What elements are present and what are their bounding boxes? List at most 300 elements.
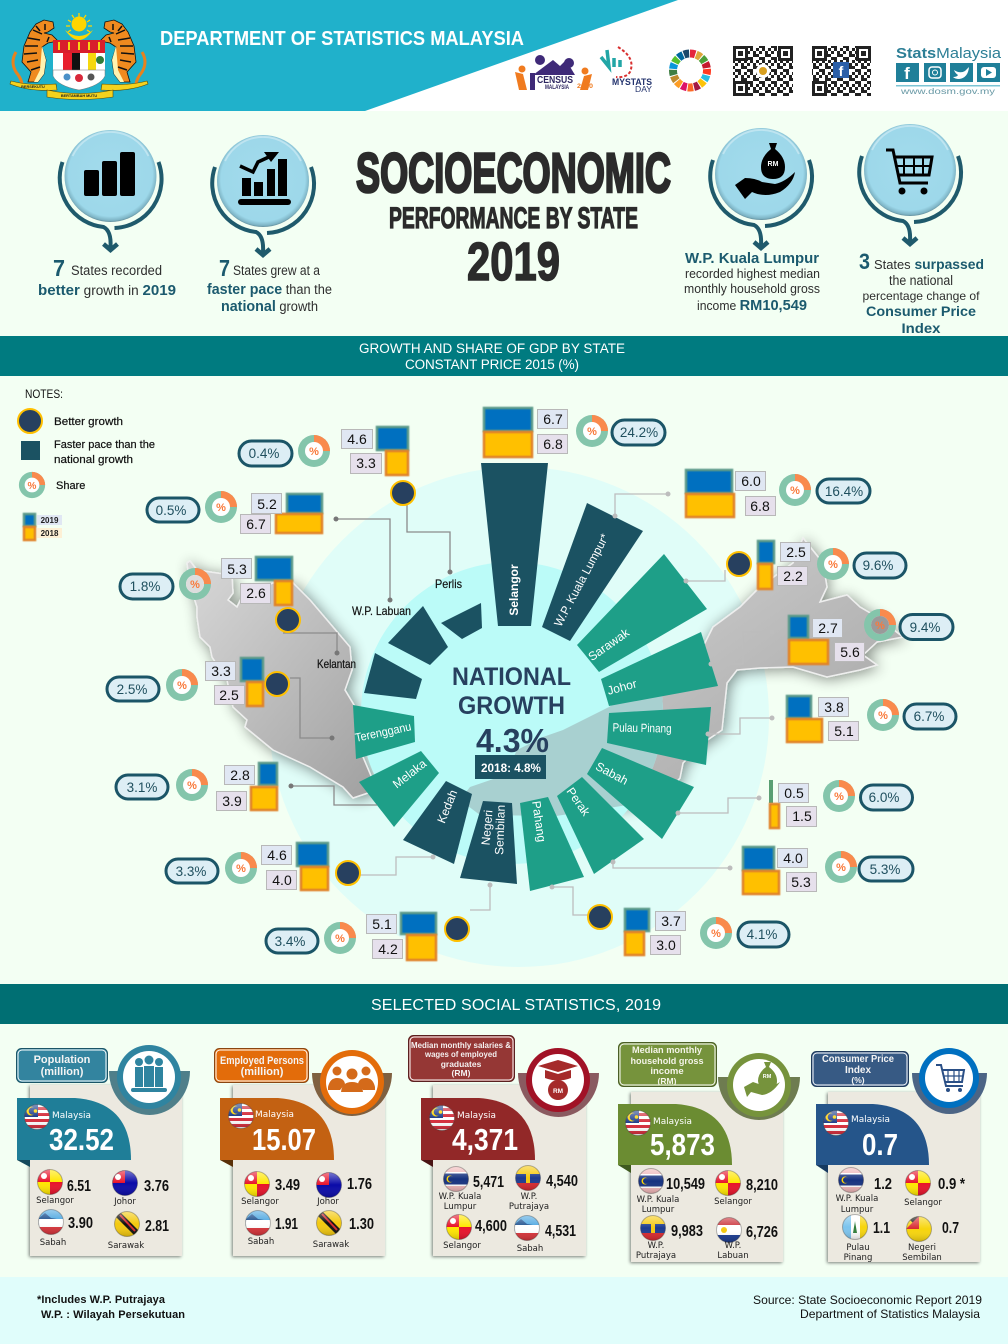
logo: Census 2020: 2020 [577, 83, 593, 90]
label: household gross [630, 1056, 704, 1067]
states: W.P. Kuala [836, 1194, 878, 1204]
state: Melaka [116, 763, 377, 810]
wedge: Kedah: Kedah [434, 788, 460, 825]
bars: 6.7 [543, 411, 563, 427]
bars [769, 780, 816, 828]
states [241, 1171, 374, 1250]
section band: selected social statistics: SELECTED SOCIAL STATISTICS, 2019 [371, 997, 661, 1014]
logo: MyStats Day: MYSTATS [612, 77, 652, 88]
text: 7 states grew at a faster pace: faster pace than the [207, 281, 332, 298]
states: Putrajaya [636, 1251, 676, 1261]
state: Sarawak [684, 541, 906, 589]
text: 3 states surpassed CPI: States surpassed [874, 256, 984, 272]
wedge: Negeri Sembilan [460, 801, 517, 884]
wedge: Johor: Johor [606, 676, 638, 698]
label [618, 1042, 716, 1086]
text: 7 states grew at a faster pace: national growth [221, 298, 318, 315]
section band: selected social statistics [0, 984, 1008, 1024]
label: Index [845, 1065, 871, 1076]
QR code: website [733, 46, 793, 96]
legend: better growth [18, 409, 123, 433]
donut and share pill [166, 852, 257, 884]
wedge: WP Kuala Lumpur: W.P. Kuala Lumpur* [551, 531, 612, 629]
map: Sabah and Sarawak [505, 538, 903, 816]
bars: 3.9 [222, 793, 242, 809]
malaysia ribbon [618, 1104, 732, 1173]
states: 1.30 [349, 1216, 374, 1233]
states: Selangor [443, 1241, 481, 1251]
dot: better growth [276, 608, 300, 632]
bars: 6.8 [543, 436, 563, 452]
icon: shopping cart [912, 1048, 987, 1114]
bars: 5.6 [840, 644, 860, 660]
wedge: Perlis [441, 603, 482, 639]
states: 1.91 [275, 1216, 298, 1233]
states: Labuan [717, 1251, 749, 1261]
text: 7 states recorded better growth: States recorded [71, 263, 162, 278]
footnotes [37, 1294, 185, 1321]
label [408, 1036, 514, 1082]
malaysia ribbon: Malaysia [457, 1111, 496, 1121]
malaysia ribbon [17, 1098, 131, 1167]
bars: 3.3 [356, 455, 376, 471]
subtitle: Performance by State: PERFORMANCE BY STATE [389, 202, 638, 235]
bars: 2.7 [818, 620, 838, 636]
legend: faster pace: national growth [54, 454, 133, 466]
states: Selangor [241, 1197, 279, 1207]
icon: graduation cap [518, 1048, 599, 1117]
wedge: Melaka: Melaka [390, 756, 429, 791]
bars: 6.0 [741, 473, 761, 489]
donut and share pill: 9.6% [863, 558, 893, 573]
panel: household income [618, 1042, 800, 1262]
bars: 6.7 [246, 516, 266, 532]
donut and share pill: 1.8% [130, 579, 160, 594]
text: KL median income: income RM10,549 [697, 297, 807, 314]
logo: MyStats Day: DAY [635, 84, 652, 94]
donut and share pill [823, 780, 912, 812]
state: WP Kuala Lumpur [612, 470, 870, 518]
states: W.P. Kuala [637, 1195, 679, 1205]
icon: bar chart pin [60, 130, 162, 250]
text: KL median income: monthly household gross [684, 282, 820, 296]
wedge: WP Labuan [388, 606, 448, 665]
bars: 5.1 [372, 916, 392, 932]
bars [625, 909, 686, 955]
state: Selangor [484, 408, 665, 457]
text: 7 states grew at a faster pace: 7 [219, 255, 230, 281]
malaysia ribbon: Malaysia [255, 1110, 294, 1120]
donut and share pill: 0.4% [249, 446, 279, 461]
dot: better growth [391, 481, 415, 505]
states: 10,549 [666, 1176, 705, 1193]
wedge: Negeri Sembilan: Sembilan [492, 805, 508, 855]
states: 8,210 [746, 1177, 778, 1194]
states: Selangor [714, 1197, 752, 1207]
text: 7 states recorded better growth [38, 255, 176, 299]
text: 3 states surpassed CPI: Index [902, 320, 941, 336]
malaysia ribbon: Malaysia [653, 1117, 692, 1127]
donut and share pill: % [177, 680, 187, 692]
header banner [0, 0, 1008, 111]
icon: shopping cart pin [859, 124, 961, 244]
legend: better growth: Better growth [54, 416, 123, 428]
donut and share pill [867, 699, 956, 731]
state: Pahang [550, 884, 789, 955]
StatsMalaysia social block: www.dosm.gov.my [900, 86, 996, 96]
map: Peninsular Malaysia [187, 561, 377, 798]
state: Perak [610, 847, 913, 894]
wedge: Sabah [587, 748, 694, 839]
states: 0.9 * [938, 1176, 966, 1193]
text: 3 states surpassed CPI [859, 249, 984, 336]
states: 4,531 [545, 1223, 576, 1240]
panel: graduate salaries [408, 1036, 599, 1256]
label [16, 1048, 108, 1082]
state: Sabah [676, 780, 912, 828]
icon: hand with money bag pin [710, 128, 812, 248]
states: Pinang [844, 1253, 872, 1263]
national growth centre [452, 663, 571, 779]
source: Department of Statistics Malaysia [800, 1307, 980, 1321]
bars [240, 494, 322, 534]
source [753, 1293, 982, 1321]
label: (RM) [658, 1076, 677, 1086]
footer band [0, 1277, 1008, 1344]
bars [758, 541, 810, 589]
legend: faster pace [21, 439, 155, 466]
label: Kelantan: Kelantan [317, 657, 356, 671]
icon: Malaysia coat of arms [10, 13, 148, 100]
header title: DEPARTMENT OF STATISTICS MALAYSIA [160, 28, 524, 50]
bars: 4.0 [783, 850, 803, 866]
icon: people [109, 1045, 190, 1115]
label: graduates [441, 1059, 482, 1069]
malaysia ribbon [816, 1104, 929, 1173]
donut and share pill: 9.4% [910, 620, 940, 635]
dot: better growth [336, 861, 360, 885]
bars: 6.8 [750, 498, 770, 514]
wedge: Terengganu: Terengganu [354, 719, 413, 745]
states: 6.51 [67, 1178, 91, 1195]
states: 5,471 [473, 1174, 504, 1191]
icon: hand with money bag pin: RM [768, 161, 779, 168]
states: Lumpur [444, 1202, 477, 1212]
icon: rising chart pin [212, 135, 314, 255]
label: (million) [41, 1066, 84, 1078]
panel: population [16, 1045, 190, 1256]
states: Sembilan [902, 1253, 942, 1263]
text: 7 states grew at a faster pace [207, 255, 332, 315]
malaysia ribbon [421, 1098, 535, 1167]
logo: Census 2020 [515, 55, 593, 91]
bars: 5.3 [227, 561, 247, 577]
wedge: Kedah [403, 781, 472, 864]
bars: 5.1 [834, 723, 854, 739]
label: (million) [241, 1066, 284, 1078]
states: 3.76 [144, 1178, 169, 1195]
label [214, 1048, 308, 1082]
text: 7 states grew at a faster pace: States grew at a [233, 263, 320, 278]
malaysia ribbon: 5,873 [650, 1127, 715, 1162]
donut and share pill: % [711, 928, 721, 940]
notes legend: NOTES: [25, 387, 63, 401]
legend: faster pace: Faster pace than the [54, 439, 155, 451]
text: 3 states surpassed CPI: 3 [859, 249, 870, 274]
donut and share pill: 6.0% [869, 790, 899, 805]
bars [743, 847, 816, 894]
states: Sarawak [313, 1240, 349, 1250]
national growth centre: 2018: 4.8% [481, 761, 541, 775]
key fact 3: WP Kuala Lumpur income [684, 128, 820, 314]
donut and share pill: % [236, 863, 246, 875]
icon: graduation cap: RM [553, 1088, 563, 1095]
states: Sabah [248, 1237, 274, 1247]
donut and share pill [239, 435, 330, 467]
bars [222, 557, 292, 605]
states: 0.7 [942, 1220, 959, 1237]
donut and share pill [576, 415, 665, 447]
dot: better growth [265, 672, 289, 696]
panel: consumer price index [812, 1048, 987, 1263]
bars: 4.6 [267, 847, 287, 863]
icon: Malaysia coat of arms: BERTAMBAH MUTU [61, 94, 97, 98]
bars: 4.2 [378, 941, 398, 957]
icon: hand and money bag [718, 1053, 800, 1120]
donut and share pill: % [587, 426, 597, 438]
chart backdrop: inner circle [361, 564, 663, 864]
label: Population [34, 1054, 91, 1066]
label: WP Labuan: W.P. Labuan [352, 604, 411, 618]
states [636, 1168, 778, 1261]
wedge: Terengganu [353, 705, 415, 759]
StatsMalaysia social block: f [904, 64, 910, 83]
donut and share pill [864, 609, 953, 641]
donut and share pill: 4.1% [747, 927, 777, 942]
malaysia ribbon: 4,371 [452, 1122, 518, 1157]
legend: 2019 and 2018 colours [24, 514, 62, 540]
text: KL median income: recorded highest median [685, 267, 820, 281]
dot: better growth [727, 552, 751, 576]
donut and share pill [107, 669, 198, 701]
donut and share pill: % [878, 710, 888, 722]
bars: 4.6 [347, 431, 367, 447]
legend: share: Share [56, 480, 85, 492]
states: Putrajaya [509, 1202, 549, 1212]
label: income [650, 1066, 684, 1077]
bars: 3.0 [656, 937, 676, 953]
bars: 2.8 [230, 767, 250, 783]
legend: 2019 and 2018 colours: 2018 [41, 529, 59, 538]
dot: better growth [445, 917, 469, 941]
malaysia ribbon [220, 1098, 334, 1167]
donut and share pill [120, 568, 211, 600]
donut and share pill: 3.4% [275, 934, 305, 949]
wedge: Sabah: Sabah [593, 759, 630, 788]
bars [262, 843, 328, 890]
wedge: Pulau Pinang [607, 707, 711, 765]
label: wages of employed [424, 1049, 497, 1059]
malaysia ribbon: 15.07 [252, 1122, 316, 1157]
donut and share pill: % [828, 559, 838, 571]
label: (%) [851, 1075, 865, 1085]
states [36, 1169, 169, 1251]
label: (RM) [452, 1068, 471, 1078]
logo: Census 2020: MALAYSIA [545, 85, 570, 91]
footnotes: *Includes W.P. Putrajaya [37, 1294, 166, 1306]
text: 7 states recorded better growth: better growth in 2019 [38, 282, 176, 299]
donut and share pill: 3.1% [127, 780, 157, 795]
QR code: Facebook: f [839, 63, 844, 79]
wedge: Pahang [520, 797, 584, 891]
donut and share pill: 2.5% [117, 682, 147, 697]
wedge: Sarawak: Sarawak [586, 625, 633, 664]
malaysia ribbon: Malaysia [851, 1115, 890, 1125]
logo: MyStats Day [601, 47, 652, 94]
wedge: Johor [601, 632, 718, 706]
text: 3 states surpassed CPI: percentage change of [862, 289, 980, 303]
state: Terengganu [107, 658, 334, 740]
panel: employed persons [214, 1048, 392, 1256]
national growth centre: 4.3% [476, 722, 549, 759]
text: 7 states recorded better growth: 7 [53, 255, 65, 281]
bars: 2.6 [246, 585, 266, 601]
states: Johor [316, 1197, 339, 1207]
bars: 4.0 [272, 872, 292, 888]
donut and share pill [779, 474, 870, 506]
state: Negeri Sembilan [266, 882, 492, 960]
label: Perlis: Perlis [435, 577, 462, 591]
StatsMalaysia social block [896, 45, 1002, 96]
icon: Malaysia coat of arms: BERSEKUTU [21, 85, 45, 89]
states: 3.49 [275, 1177, 300, 1194]
donut and share pill: % [335, 933, 345, 945]
state: Kelantan [120, 557, 340, 656]
legend: share [19, 472, 85, 498]
states: 6,726 [746, 1224, 778, 1241]
text: 3 states surpassed CPI: the national [889, 273, 953, 288]
donut and share pill: % [187, 780, 197, 792]
wedge: Perak: Perak [564, 785, 594, 819]
states: 2.81 [145, 1218, 169, 1235]
states: Pulau [846, 1243, 870, 1253]
donut and share pill: 16.4% [825, 484, 863, 499]
text: KL median income: W.P. Kuala Lumpur [685, 250, 819, 267]
wedge: Kelantan [364, 653, 422, 699]
state: Pulau Pinang [706, 696, 956, 742]
radial chart: state wedges [353, 463, 718, 891]
section band: growth and share of GDP: CONSTANT PRICE 2015 (%) [405, 357, 579, 372]
bars: 2.5 [219, 687, 239, 703]
label [812, 1052, 908, 1086]
states [439, 1165, 578, 1254]
bars [366, 913, 436, 960]
donut and share pill: % [875, 620, 885, 632]
bars: 5.2 [257, 496, 277, 512]
states: W.P. [648, 1241, 664, 1251]
label: Median monthly salaries & [411, 1040, 511, 1050]
malaysia ribbon: 32.52 [49, 1122, 114, 1157]
states: Selangor [36, 1196, 74, 1206]
bars [787, 696, 858, 742]
donut and share pill: 5.3% [870, 862, 900, 877]
donut and share pill: 3.3% [176, 864, 206, 879]
states: Sarawak [108, 1241, 144, 1251]
state: Johor [708, 609, 953, 666]
wedge: Pahang: Pahang [529, 800, 549, 843]
donut and share pill: 0.5% [156, 503, 186, 518]
donut and share pill: % [836, 862, 846, 874]
text: 3 states surpassed CPI: Consumer Price [866, 303, 976, 319]
icon: hand and money bag: RM [763, 1074, 772, 1080]
malaysia ribbon: Malaysia [52, 1111, 91, 1121]
bars [789, 616, 864, 664]
bars [484, 408, 568, 457]
icon: employees [312, 1050, 392, 1116]
wedge: Pulau Pinang: Pulau Pinang [612, 720, 672, 736]
bars: 3.3 [211, 663, 231, 679]
states: 4,600 [475, 1218, 507, 1235]
footnotes: W.P. : Wilayah Persekutuan [41, 1309, 185, 1321]
bars: 1.5 [792, 808, 812, 824]
bars [686, 470, 776, 517]
section band: growth and share of GDP: GROWTH AND SHARE OF GDP BY STATE [359, 341, 625, 356]
QR code: Facebook [812, 46, 871, 96]
donut and share pill: % [790, 485, 800, 497]
label: Consumer Price [822, 1054, 894, 1065]
states: Lumpur [841, 1205, 874, 1215]
donut and share pill: 6.7% [914, 709, 944, 724]
label: Median monthly [632, 1045, 703, 1056]
label: Employed Persons [220, 1055, 304, 1067]
states: Selangor [904, 1198, 942, 1208]
donut and share pill [817, 548, 906, 580]
states: Sabah [40, 1238, 66, 1248]
key fact 2: faster pace [207, 135, 332, 315]
bars: 2.2 [783, 568, 803, 584]
dot: better growth [588, 905, 612, 929]
states: Johor [113, 1197, 136, 1207]
section band: growth and share of GDP [0, 336, 1008, 376]
legend: share: % [28, 481, 37, 492]
donut and share pill [825, 851, 913, 883]
states: Lumpur [642, 1205, 675, 1215]
bars: 3.7 [661, 913, 681, 929]
donut and share pill: 24.2% [620, 425, 658, 440]
states: W.P. [725, 1241, 741, 1251]
wedge: Perak [557, 777, 644, 874]
wedge: WP Kuala Lumpur [542, 503, 643, 641]
donut and share pill: % [216, 502, 226, 514]
states: W.P. Kuala [439, 1192, 481, 1202]
bars [206, 658, 263, 706]
bars [216, 763, 277, 810]
bars: 3.8 [824, 699, 844, 715]
malaysia ribbon: 0.7 [862, 1127, 898, 1162]
wedge: Melaka [359, 751, 439, 827]
bars: 5.3 [791, 874, 811, 890]
state: Perlis [239, 427, 452, 574]
wedge: Selangor [481, 463, 548, 626]
state: WP Labuan [147, 491, 392, 602]
states: 3.90 [68, 1215, 93, 1232]
text: KL median income [684, 250, 820, 314]
states: 1.76 [347, 1176, 372, 1193]
chart backdrop: outer circle [269, 467, 769, 967]
StatsMalaysia social block: StatsMalaysia [896, 45, 1002, 62]
wedge: Selangor: Selangor [507, 564, 521, 616]
bars [342, 427, 408, 475]
